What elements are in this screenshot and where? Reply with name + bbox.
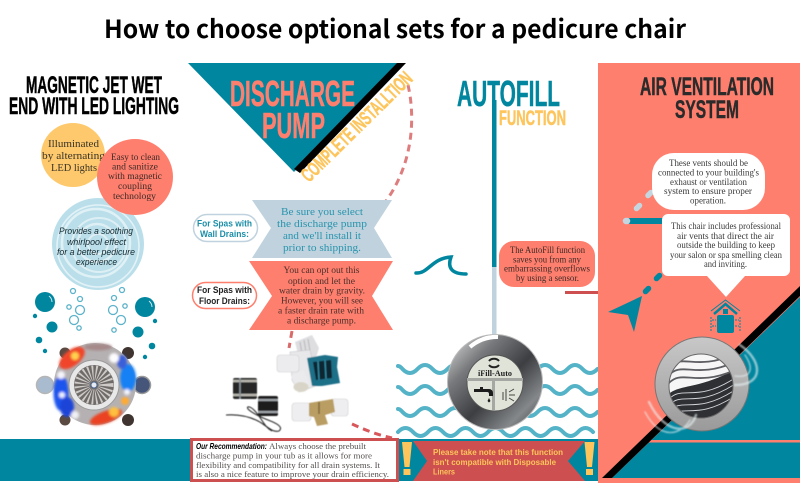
heading: magnetic jet: END WITH LED LIGHTING (9, 93, 179, 120)
icon: house vent (711, 300, 740, 333)
brass valve (309, 399, 335, 426)
pill: floor drains: For Spas with (197, 285, 252, 295)
ribbon: wall drains: prior to shipping. (283, 242, 361, 254)
label: complete installation: COMPLETE INSTALLTION (297, 68, 417, 187)
bubble: professional vents: This chair includes professional (671, 221, 781, 231)
bubble: professional vents: and inviting. (704, 259, 747, 269)
bottom teal band (0, 439, 600, 481)
black diagonal (602, 286, 800, 478)
heading: air ventilation: SYSTEM (675, 96, 739, 124)
coupling small (258, 396, 278, 416)
icon: faucet (474, 387, 493, 402)
label: iFill-Auto: iFill-Auto (478, 368, 512, 378)
ribbon: floor drains: a discharge pump. (287, 316, 356, 326)
pill: floor drains: Floor Drains: (199, 296, 250, 306)
bubble: connect vents: exhaust or ventilation (670, 177, 747, 187)
outline bubbles (67, 288, 127, 332)
icon: exclamation right (584, 442, 594, 475)
black edge (294, 63, 406, 173)
heading: discharge pump: PUMP (262, 105, 325, 146)
heading: discharge pump (230, 73, 355, 146)
image: air drain (645, 337, 757, 433)
coupling large (233, 378, 257, 399)
banner: warning: Please take note that this function (433, 447, 563, 457)
pump motor (307, 355, 340, 386)
image: autofill button (448, 334, 542, 430)
heading: air ventilation (640, 73, 774, 124)
banner: warning: Liners (433, 466, 455, 476)
ribbon: wall drains: Be sure you select (281, 206, 363, 218)
dashed connector (289, 85, 412, 438)
panel: autofill (398, 73, 598, 481)
pill: floor drains (192, 282, 256, 308)
ribbon: wall drains: the discharge pump (277, 218, 368, 230)
circle: whirlpool: experience (76, 257, 117, 267)
circle: easy to clean: Easy to clean (111, 153, 160, 163)
circle: illuminated (41, 123, 106, 187)
valve pipes (292, 403, 311, 421)
circle: whirlpool: for a better pedicure (57, 247, 135, 257)
coral strip (640, 440, 800, 442)
bubble: connect vents (652, 153, 765, 210)
circle: illuminated: Illuminated (48, 139, 100, 150)
pill: wall drains (194, 214, 258, 242)
bubble: connect vents: operation. (690, 196, 726, 206)
ribbon: floor drains: a faster drain rate with (278, 306, 364, 316)
pump inlet pipe (277, 355, 299, 372)
ribbon: floor drains: However, you will see (281, 296, 363, 306)
circle: easy to clean: technology (113, 192, 156, 202)
ribbon: floor drains (249, 261, 393, 330)
circle: whirlpool: whirlpool effect (67, 237, 126, 247)
bubble: professional vents: air vents that direct the air (677, 231, 774, 241)
callout: sensor: saves you from any (513, 254, 581, 266)
vertical line (492, 100, 496, 342)
heading: autofill: AUTOFILL (457, 73, 560, 114)
pill: wall drains: Wall Drains: (200, 229, 249, 239)
bubble: professional vents: your salon or spa smelling clean (670, 250, 782, 260)
ribbon: wall drains: and we'll install it (283, 230, 361, 242)
callout: recommendation: discharge pump in your tub as it allows for more (196, 450, 372, 460)
power cord (226, 407, 281, 431)
callout: recommendation (192, 440, 398, 480)
pill: wall drains: For Spas with (197, 218, 252, 228)
image: LED jet (36, 342, 150, 428)
banner: warning: isn't compatible with Disposable (433, 457, 556, 467)
circle: easy to clean: and sanitize (112, 162, 158, 172)
teal corner (612, 297, 800, 478)
heading: discharge pump: DISCHARGE (230, 73, 355, 114)
heading: magnetic jet (9, 72, 179, 120)
connector line (565, 291, 598, 294)
icon: wave (416, 257, 466, 274)
callout: sensor: embarrassing overflows (504, 264, 590, 274)
callout: recommendation: is also a nice feature to improve your drain efficiency. (196, 469, 389, 479)
callout: recommendation: flexibility and compatibility for all drain systems. It (196, 460, 381, 470)
heading: magnetic jet: MAGNETIC JET WET (26, 72, 162, 99)
ribbon: floor drains: option and let the (288, 276, 355, 286)
coral background (598, 63, 800, 483)
water waves (398, 365, 598, 436)
image: pump parts (226, 335, 348, 431)
callout: sensor: The AutoFill function (510, 245, 585, 256)
callout: sensor: by using a sensor. (516, 274, 579, 284)
pump terminal block (295, 335, 319, 358)
icon: refresh (489, 359, 499, 367)
panel: discharge pump (188, 63, 417, 480)
title: How to choose optional sets for a pedicure chair (104, 10, 686, 46)
circle: easy to clean (97, 139, 173, 215)
banner triangle (188, 63, 398, 172)
bubble: professional vents (662, 214, 790, 297)
bubble: connect vents: system to ensure proper (664, 186, 752, 196)
bubble: professional vents: outside the building to keep (677, 240, 775, 250)
air swooshes (645, 345, 757, 433)
circle: illuminated: LED lights (51, 163, 97, 174)
bubble: connect vents: connected to your building's (658, 168, 759, 178)
ribbon: floor drains: You can opt out this (284, 265, 360, 275)
icon: jet (503, 389, 515, 401)
panel: magnetic jet (9, 72, 179, 428)
banner: warning (413, 441, 585, 481)
pump body (290, 350, 318, 392)
circle: illuminated: by alternating (42, 151, 106, 162)
ribbon: wall drains (252, 200, 392, 258)
ribbon: floor drains: water drain by gravity. (279, 286, 365, 296)
bubble: connect vents: These vents should be (669, 158, 748, 168)
callout: recommendation: Always choose the prebuilt (269, 441, 367, 451)
circle: whirlpool (52, 198, 144, 290)
subheading: function: FUNCTION (499, 107, 566, 130)
panel: air ventilation (598, 63, 800, 483)
circle: easy to clean: with magnetic (108, 172, 162, 182)
callout: sensor (499, 241, 595, 287)
circle: easy to clean: coupling (118, 182, 152, 192)
solid bubbles (33, 292, 157, 359)
dashed path top (626, 192, 664, 292)
callout: recommendation: Our Recommendation: (196, 441, 267, 451)
icon: exclamation left (402, 442, 412, 475)
icon: paper plane (608, 296, 642, 332)
pump outlet (297, 373, 303, 386)
circle: whirlpool: Provides a soothing (59, 226, 133, 236)
